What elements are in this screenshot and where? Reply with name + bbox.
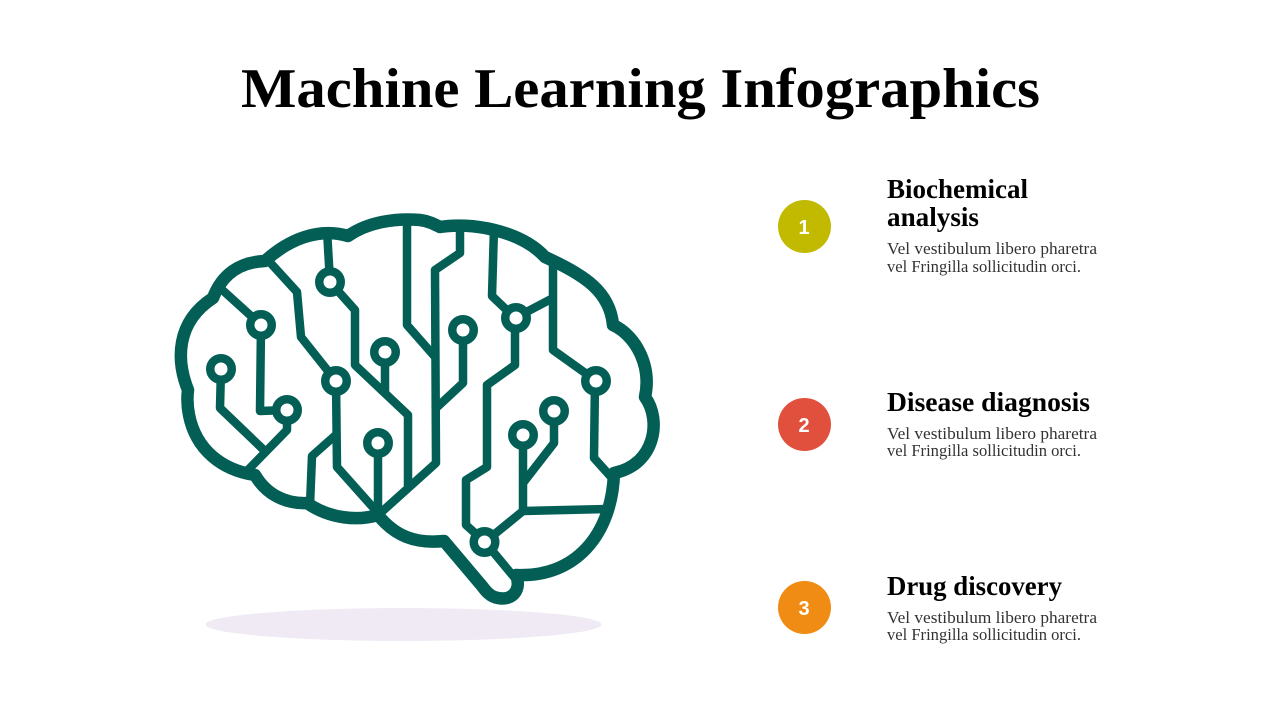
badge 3 — [778, 581, 831, 634]
description 2 — [887, 424, 1098, 460]
brain outline — [181, 220, 654, 598]
heading 1: Biochemical — [887, 174, 1028, 204]
description 1: Vel vestibulum libero pharetra — [887, 239, 1098, 258]
title: Machine Learning Infographics — [241, 58, 1040, 120]
badge 1: 1 — [798, 217, 810, 239]
heading 2: Disease diagnosis — [887, 387, 1090, 417]
item 3: drug discovery — [778, 571, 1098, 644]
description 3 — [887, 608, 1098, 644]
circuit traces — [218, 222, 612, 577]
description 3: vel Fringilla sollicitudin orci. — [887, 625, 1081, 644]
icon: circuit brain — [181, 220, 654, 598]
badge 2 — [778, 398, 831, 451]
shadow ellipse — [206, 608, 602, 641]
description 3: Vel vestibulum libero pharetra — [887, 608, 1098, 627]
badge 3: 3 — [798, 598, 810, 620]
description 1 — [887, 239, 1098, 276]
description 2: Vel vestibulum libero pharetra — [887, 424, 1098, 443]
badge 2: 2 — [798, 415, 810, 437]
circuit nodes — [210, 271, 607, 553]
heading 1: analysis — [887, 202, 979, 232]
description 2: vel Fringilla sollicitudin orci. — [887, 441, 1081, 460]
heading 1 — [887, 174, 1028, 232]
item 1: biochemical analysis — [778, 174, 1098, 276]
badge 1 — [778, 200, 831, 253]
item 2: disease diagnosis — [778, 387, 1098, 460]
description 1: vel Fringilla sollicitudin orci. — [887, 257, 1081, 276]
heading 3: Drug discovery — [887, 571, 1062, 601]
